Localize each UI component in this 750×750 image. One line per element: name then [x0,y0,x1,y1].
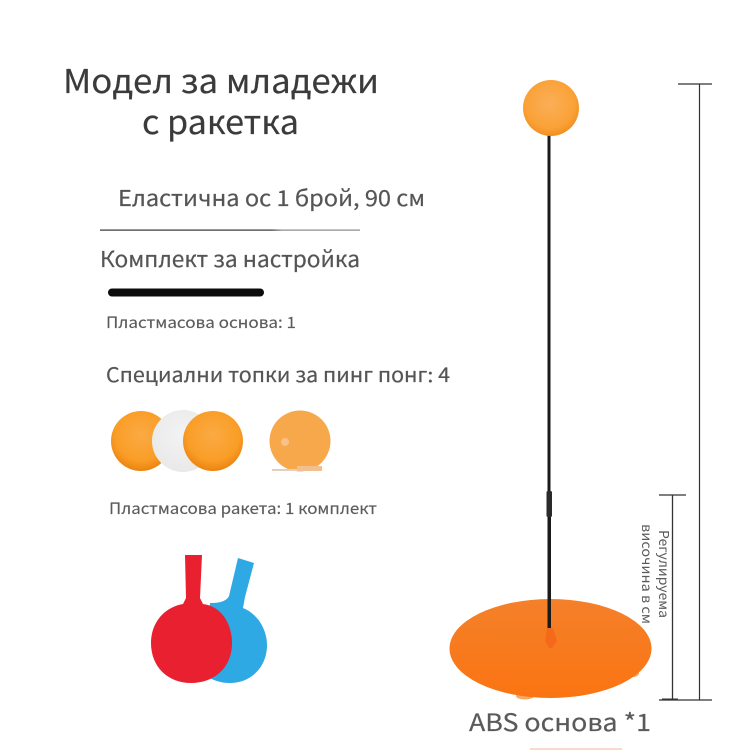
icon: single ball [270,410,330,472]
label: ABS base: ABS основа *1 [469,703,651,738]
text: special balls: Специални топки за пинг понг: 4 [106,359,450,388]
icon: paddles [151,555,267,683]
text: plastic base: Пластмасова основа: 1 [106,311,296,333]
text: plastic racket: Пластмасова ракета: 1 комплект [109,497,377,519]
icon: orange ball [523,80,579,136]
shaft illustration [108,288,264,296]
icon: pole socket [545,628,557,648]
icon: red paddle [151,555,232,683]
label: adjustable height: височина в см [638,524,658,624]
text: elastic shaft: Еластична ос 1 брой, 90 см [118,181,425,213]
label: adjustable height: Регулируема [655,530,675,618]
product: pole with ball and base [450,80,652,700]
text: adjustment set: Комплект за настройка [100,242,360,274]
icon: group of three balls [111,410,243,472]
icon: blue paddle [205,558,267,683]
pole [546,135,552,630]
title: Модел за младежи [63,55,379,103]
icon: orange base [450,599,652,700]
dimension line: adjustable height [659,495,686,700]
title: с ракетка [142,96,299,144]
dimension line: full height [659,84,712,700]
label: adjustable height [638,524,675,624]
title [63,55,379,144]
bottom edge strip [530,748,622,750]
